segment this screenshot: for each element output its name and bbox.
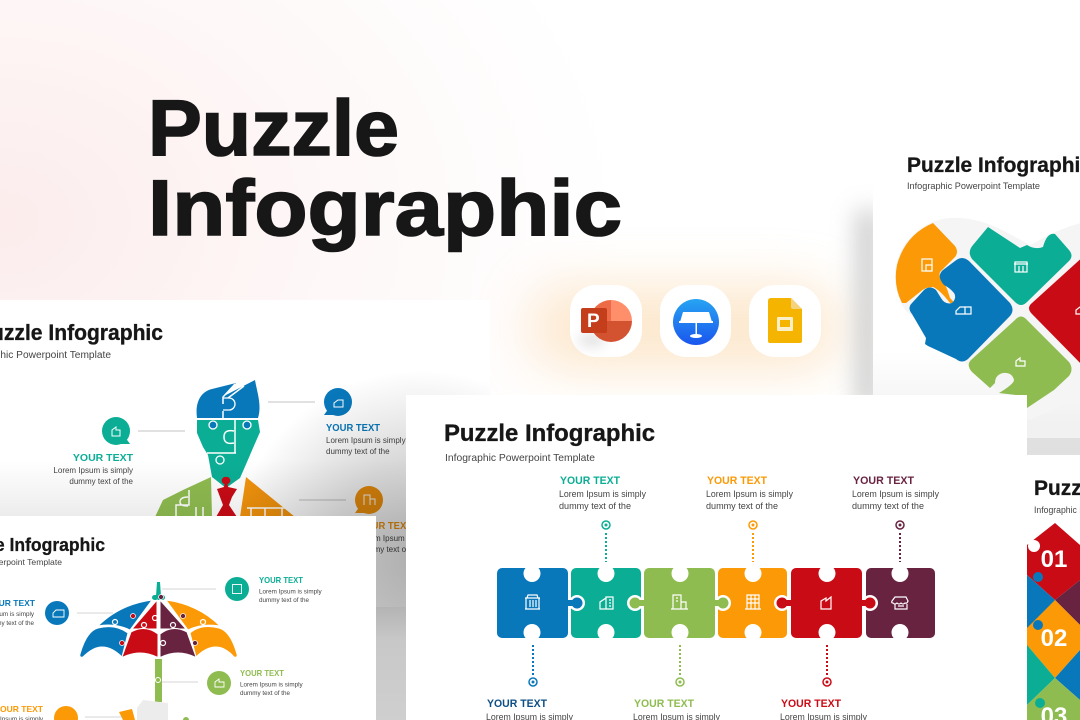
connector bbox=[162, 682, 198, 683]
panel: umbrella slide bbox=[0, 516, 376, 720]
label: teal bbox=[259, 575, 322, 604]
piece 4: orange bbox=[718, 568, 787, 638]
figure: man bbox=[155, 380, 295, 517]
label: bottom blue: YOUR TEXT bbox=[487, 698, 547, 710]
label: bottom red: YOUR TEXT bbox=[781, 698, 841, 710]
label: top orange: dummy text of the bbox=[706, 501, 778, 511]
label: green bbox=[240, 668, 303, 697]
label: bottom red bbox=[780, 698, 867, 720]
label: top teal: dummy text of the bbox=[559, 501, 631, 511]
title: Infographic bbox=[148, 163, 622, 252]
label: green: Lorem Ipsum is simply bbox=[240, 682, 303, 688]
bubble: teal bbox=[102, 417, 130, 445]
heading: Puzzle Infographic bbox=[444, 420, 655, 447]
label: top purple: Lorem Ipsum is simply bbox=[852, 489, 939, 499]
connector bbox=[268, 402, 315, 403]
label: top purple bbox=[852, 475, 939, 511]
notches bbox=[524, 565, 908, 641]
panel: main slide bbox=[406, 395, 1027, 720]
puzzle piece: blue bbox=[910, 258, 1012, 362]
label: green: YOUR TEXT bbox=[240, 668, 285, 678]
piece 6: purple bbox=[866, 568, 935, 638]
bubble: green bbox=[207, 671, 231, 695]
label: top orange: YOUR TEXT bbox=[707, 475, 767, 487]
panel: heart slide bbox=[873, 130, 1080, 438]
label: orange: dummy text of the bbox=[358, 545, 422, 554]
label: teal bbox=[53, 452, 134, 486]
label: green: dummy text of the bbox=[240, 690, 291, 697]
label: blue: YOUR TEXT bbox=[326, 422, 381, 434]
strip icons bbox=[525, 595, 908, 609]
heart slide shadow bbox=[856, 210, 880, 410]
label: orange bbox=[0, 704, 44, 720]
puzzle piece: orange bbox=[896, 223, 957, 304]
label: top purple: dummy text of the bbox=[852, 501, 924, 511]
label: blue bbox=[0, 600, 35, 626]
puzzle tiles bbox=[1027, 523, 1080, 720]
label: top teal: YOUR TEXT bbox=[560, 475, 620, 487]
piece 1: blue bbox=[497, 568, 568, 638]
label: top teal: Lorem Ipsum is simply bbox=[559, 489, 646, 499]
puzzle piece: green bbox=[969, 316, 1072, 408]
connector bbox=[85, 716, 123, 718]
icon: PowerPoint bbox=[570, 285, 642, 357]
gray band bbox=[1027, 438, 1080, 455]
label: top orange: Lorem Ipsum is simply bbox=[706, 489, 793, 499]
label: bottom green: YOUR TEXT bbox=[634, 698, 694, 710]
icon glow bbox=[530, 285, 840, 370]
bubble: orange bbox=[355, 486, 383, 514]
knobs bbox=[566, 598, 876, 608]
marker: green bbox=[676, 645, 684, 686]
piece 2: teal bbox=[571, 568, 641, 638]
connector bbox=[77, 612, 113, 614]
numbers: 02 bbox=[1041, 625, 1067, 652]
connector bbox=[162, 588, 216, 590]
marker: red bbox=[823, 645, 831, 686]
title: Puzzle bbox=[148, 83, 399, 172]
puzzle strip bbox=[497, 565, 935, 641]
label: top purple: YOUR TEXT bbox=[853, 475, 914, 487]
label: bottom blue bbox=[486, 698, 573, 720]
numbers bbox=[1041, 546, 1067, 720]
bubble: blue bbox=[324, 388, 352, 416]
label: teal: dummy text of the bbox=[69, 477, 134, 486]
subheading: Infographic Powerpoint Template bbox=[907, 181, 1040, 192]
label: orange bbox=[376, 522, 406, 554]
label: orange: Lorem Ipsum is simply bbox=[358, 534, 438, 543]
umbrella bbox=[80, 582, 237, 720]
label: top teal bbox=[559, 475, 646, 511]
label: teal: YOUR TEXT bbox=[73, 452, 134, 464]
marker: orange bbox=[749, 521, 757, 562]
puzzle piece: red bbox=[1029, 255, 1080, 368]
title bbox=[148, 83, 622, 252]
connector bbox=[138, 430, 185, 432]
subheading: Infographic Powerpoint Template bbox=[445, 452, 595, 464]
numbers: 01 bbox=[1041, 546, 1067, 573]
shadow gutter bbox=[376, 607, 406, 720]
icon: PowerPoint: P bbox=[587, 311, 600, 332]
bubble: orange bbox=[54, 706, 78, 720]
label: orange: YOUR TEXT bbox=[358, 520, 413, 532]
heart backdrop bbox=[896, 218, 1080, 362]
piece 5: red bbox=[791, 568, 862, 638]
bubble: teal bbox=[225, 577, 249, 601]
label: blue bbox=[326, 422, 406, 456]
icons bbox=[922, 259, 1080, 366]
label: blue: dummy text of the bbox=[326, 447, 390, 456]
piece 3: green bbox=[644, 568, 715, 638]
shading: corner bbox=[258, 390, 461, 607]
shading: bottom bbox=[0, 485, 406, 607]
puzzle piece: teal bbox=[970, 227, 1072, 305]
marker: blue bbox=[529, 645, 537, 686]
label: teal: Lorem Ipsum is simply bbox=[53, 466, 133, 475]
panel: right slide bbox=[1027, 455, 1080, 720]
marker: teal bbox=[602, 521, 610, 562]
connector bbox=[299, 500, 346, 501]
label: teal: Lorem Ipsum is simply bbox=[259, 588, 322, 596]
label: teal: dummy text of the bbox=[259, 597, 310, 604]
bubble: blue bbox=[45, 601, 69, 625]
icon: Google Slides bbox=[749, 285, 821, 357]
label: top orange bbox=[706, 475, 793, 511]
marker: purple bbox=[896, 521, 904, 562]
panel: man slide bbox=[0, 300, 490, 607]
label: teal: YOUR TEXT bbox=[259, 575, 304, 585]
icon: Keynote bbox=[660, 285, 731, 357]
label: bottom green bbox=[633, 698, 720, 720]
label: blue: Lorem Ipsum is simply bbox=[326, 436, 406, 445]
